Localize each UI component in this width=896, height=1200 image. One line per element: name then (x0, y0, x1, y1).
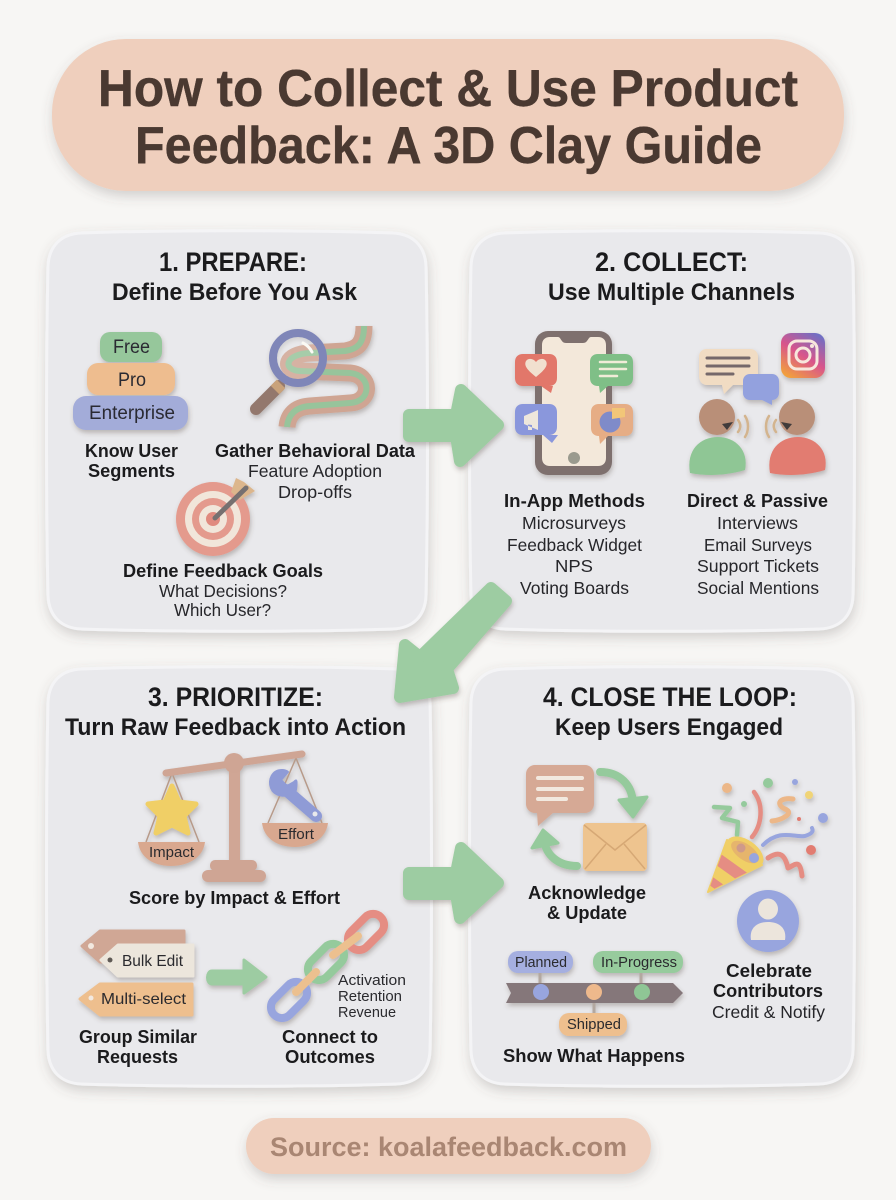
in-app methods list: Voting Boards (520, 578, 629, 598)
celebrate contributors label: Credit & Notify (712, 1002, 825, 1022)
outcome metrics list (338, 972, 406, 1021)
group similar requests label: Requests (97, 1046, 178, 1067)
panel 2 background (470, 231, 854, 631)
icon: user segment stack (73, 332, 188, 430)
panel 1 heading: Define Before You Ask (112, 279, 358, 306)
acknowledge and update label: & Update (547, 902, 627, 923)
panel 2 heading (548, 247, 795, 306)
status timeline: In-Progress (601, 954, 677, 971)
outcome metrics list: Activation (338, 972, 406, 989)
gather behavioral data label (215, 440, 416, 502)
panel 3 heading (65, 682, 406, 741)
group similar requests label: Group Similar (79, 1026, 197, 1047)
source text: Source: koalafeedback.com (270, 1132, 627, 1162)
status timeline (506, 951, 683, 1036)
arrow: collect to prioritize (400, 588, 506, 697)
panel 1 heading: 1. PREPARE: (159, 247, 307, 277)
direct and passive list (687, 490, 828, 598)
gather behavioral data label: Drop-offs (278, 482, 352, 502)
panel: 2 collect (470, 231, 854, 631)
icon: balance scale (138, 753, 328, 882)
icon: magnifier over data path (256, 326, 366, 427)
icon: target with dart (176, 478, 255, 556)
source pill background (246, 1118, 651, 1174)
icon: user segment stack: Enterprise (89, 402, 175, 424)
connect to outcomes label: Connect to (282, 1026, 378, 1047)
icon: grouped tags (80, 931, 193, 1015)
source pill (246, 1118, 651, 1174)
celebrate contributors label (712, 960, 825, 1022)
connect to outcomes label (282, 1026, 378, 1067)
icon: balance scale: Impact (149, 844, 195, 861)
define feedback goals label: Which User? (174, 600, 271, 620)
icon: user segment stack: Free (113, 336, 150, 358)
arrow: prioritize to close the loop (409, 848, 498, 918)
in-app methods list: Feedback Widget (507, 535, 642, 555)
direct and passive list: Interviews (717, 513, 798, 533)
title (52, 39, 844, 191)
icon: conversation and social (689, 333, 826, 475)
icon: phone with in-app bubbles (515, 331, 633, 475)
define feedback goals label: Define Feedback Goals (123, 560, 323, 581)
acknowledge and update label: Acknowledge (528, 882, 646, 903)
title text: Feedback: A 3D Clay Guide (135, 117, 762, 175)
know user segments label (85, 440, 178, 481)
arrow: prepare to collect (409, 390, 498, 461)
score by impact and effort label: Score by Impact & Effort (129, 887, 340, 908)
direct and passive list: Email Surveys (704, 535, 812, 555)
outcome metrics list: Retention (338, 988, 402, 1005)
panel 2 heading: 2. COLLECT: (595, 247, 748, 277)
gather behavioral data label: Gather Behavioral Data (215, 440, 416, 461)
define feedback goals label (123, 560, 323, 620)
celebrate contributors label: Contributors (713, 980, 823, 1001)
gather behavioral data label: Feature Adoption (248, 461, 382, 481)
in-app methods list: NPS (555, 556, 593, 576)
know user segments label: Know User (85, 440, 178, 461)
title text (98, 60, 798, 175)
direct and passive list: Support Tickets (697, 556, 819, 576)
icon: grouped tags: Bulk Edit (122, 953, 184, 970)
connect to outcomes label: Outcomes (285, 1046, 375, 1067)
define feedback goals label: What Decisions? (159, 581, 287, 601)
panel 1 background (46, 231, 428, 631)
acknowledge and update label (528, 882, 646, 923)
panel: 3 prioritize (46, 667, 432, 1086)
icon: feedback loop (526, 765, 647, 871)
panel 1 heading (112, 247, 358, 306)
group similar requests label (79, 1026, 197, 1067)
status timeline: Shipped (567, 1016, 621, 1033)
panel 3 background (46, 667, 432, 1086)
know user segments label: Segments (88, 460, 175, 481)
show what happens label: Show What Happens (503, 1045, 685, 1066)
status timeline: Planned (515, 954, 567, 971)
in-app methods list: Microsurveys (522, 513, 626, 533)
direct and passive list: Social Mentions (697, 578, 819, 598)
in-app methods list (504, 490, 645, 598)
panel 3 heading: Turn Raw Feedback into Action (65, 714, 406, 741)
panel 4 background (470, 667, 854, 1086)
celebrate contributors label: Celebrate (726, 960, 812, 981)
panel 4 heading: Keep Users Engaged (555, 714, 783, 741)
in-app methods list: In-App Methods (504, 490, 645, 511)
icon: small green arrow (208, 960, 266, 993)
panel 4 heading (543, 682, 797, 741)
direct and passive list: Direct & Passive (687, 490, 828, 511)
icon: user segment stack: Pro (118, 369, 146, 391)
panel 4 heading: 4. CLOSE THE LOOP: (543, 682, 797, 712)
title pill (52, 39, 844, 191)
panel 3 heading: 3. PRIORITIZE: (148, 682, 323, 712)
icon: chain links (266, 909, 389, 1023)
icon: balance scale: Effort (278, 826, 315, 843)
panel: 4 close the loop (470, 667, 854, 1086)
panel: 1 prepare (46, 231, 428, 631)
icon: party popper and confetti (708, 778, 828, 892)
panel 2 heading: Use Multiple Channels (548, 279, 795, 306)
outcome metrics list: Revenue (338, 1004, 396, 1021)
icon: grouped tags: Multi-select (101, 991, 187, 1008)
icon: contributor avatar (737, 890, 799, 952)
title text: How to Collect & Use Product (98, 60, 798, 118)
